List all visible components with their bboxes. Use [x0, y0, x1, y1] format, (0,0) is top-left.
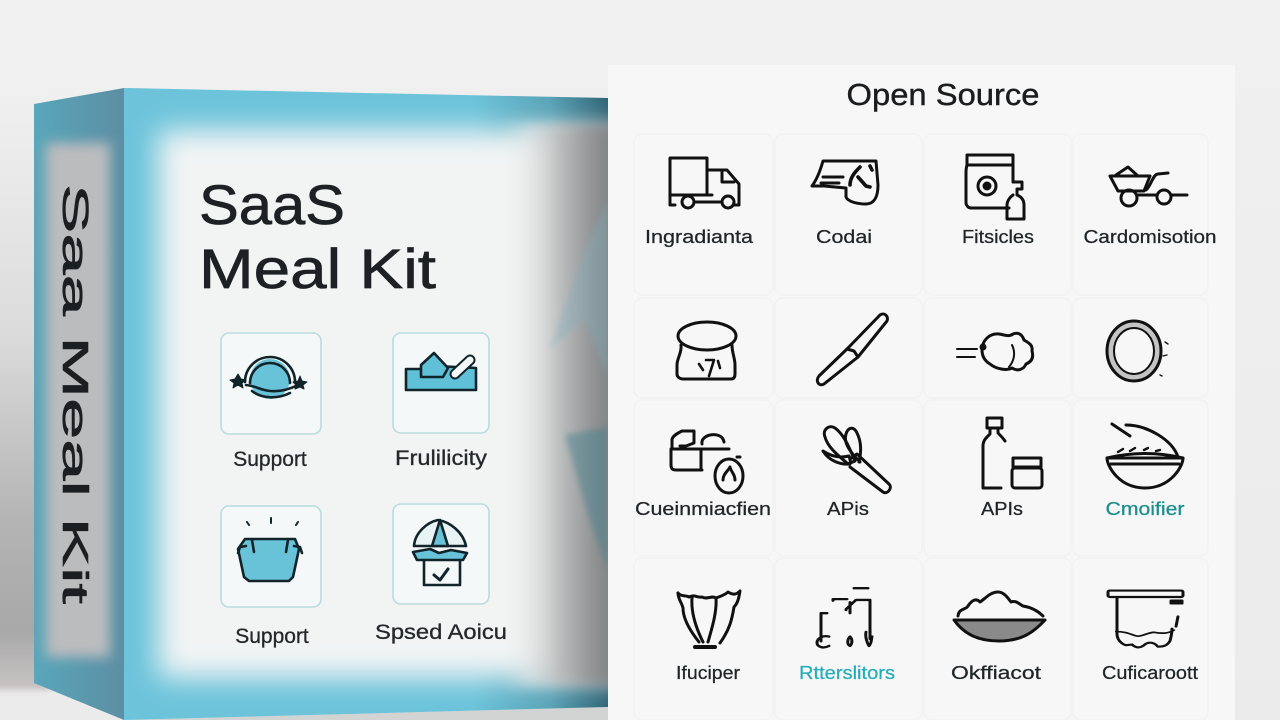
box title: Meal Kit	[199, 237, 437, 300]
cell: code: Codai	[816, 227, 872, 247]
icon: bottle and jar	[983, 418, 1042, 488]
cell: certificate: Cuficaroott	[1102, 663, 1198, 683]
icon: fish blob	[957, 333, 1033, 370]
icon: wheelbarrow	[1110, 167, 1187, 206]
icon: plate	[230, 357, 307, 399]
cell: emulsifier: Cmoifier	[1106, 499, 1184, 519]
cell: fasteners: Fitsicles	[962, 227, 1034, 247]
box title	[199, 173, 437, 300]
icon: plate ring	[1107, 321, 1168, 381]
cell: certificate	[1073, 558, 1208, 720]
cell: apis 2	[924, 400, 1071, 556]
icon: laptop sheet	[812, 161, 878, 204]
box front panel	[124, 88, 658, 720]
icon: pot	[238, 518, 302, 581]
cell: apis	[775, 400, 922, 556]
icon: leaf bouquet	[678, 591, 740, 647]
cell: apis 2: APIs	[981, 499, 1023, 519]
icon: jar and bottle	[966, 155, 1024, 219]
box side panel	[34, 88, 124, 720]
cell: ring	[1073, 298, 1208, 398]
cell: alternatives: Rtterslitors	[799, 663, 895, 683]
feature: support	[221, 333, 321, 471]
cell: recipes: Ifuciper	[676, 663, 740, 683]
cell: customization	[1073, 134, 1216, 295]
cell: code	[775, 134, 922, 295]
cell: customization: Cardomisotion	[1084, 227, 1216, 247]
cell: customization 2: Cueinmiacfien	[635, 499, 771, 519]
icon: pot on shelf	[1108, 591, 1183, 647]
cell: alternatives	[775, 558, 922, 720]
icon: truck	[670, 158, 739, 208]
icon: measuring tools	[817, 588, 872, 647]
icon: dome	[413, 520, 467, 585]
icon: spoons	[823, 427, 890, 493]
panel heading: Open Source	[846, 77, 1040, 112]
box side title: Saa Meal Kit	[55, 184, 96, 604]
feature: frugality	[393, 333, 489, 470]
cell: okra: Okffiacot	[951, 663, 1041, 683]
feature: support pot: Support	[235, 625, 309, 648]
cell: okra	[924, 558, 1071, 720]
icon: bowl of rice	[954, 592, 1045, 641]
cell: fasteners	[924, 134, 1071, 295]
cell: ingredients	[634, 134, 773, 295]
cell: ingredients: Ingradianta	[645, 227, 754, 247]
cell: recipes	[634, 558, 773, 720]
cell: knife	[775, 298, 922, 398]
cell: apis: APis	[827, 499, 869, 519]
cell: customization 2	[634, 400, 773, 556]
product box	[34, 88, 658, 720]
panel: open source	[608, 65, 1235, 720]
feature: support pot	[221, 506, 321, 648]
icon: bowl with spatula	[1107, 424, 1183, 488]
feature: support: Support	[233, 448, 307, 471]
cell: blob	[924, 298, 1071, 398]
cell: jar	[634, 298, 773, 398]
icon: jar	[677, 322, 736, 379]
icon: scale and pots	[671, 431, 743, 493]
box title: SaaS	[199, 173, 345, 236]
feature: frugality: Frulilicity	[395, 447, 488, 470]
icon: tray	[406, 353, 476, 390]
feature: speed advice	[375, 504, 507, 644]
feature: speed advice: Spsed Aoicu	[375, 621, 507, 644]
icon: knife	[817, 314, 887, 385]
cell: emulsifier	[1073, 400, 1208, 556]
